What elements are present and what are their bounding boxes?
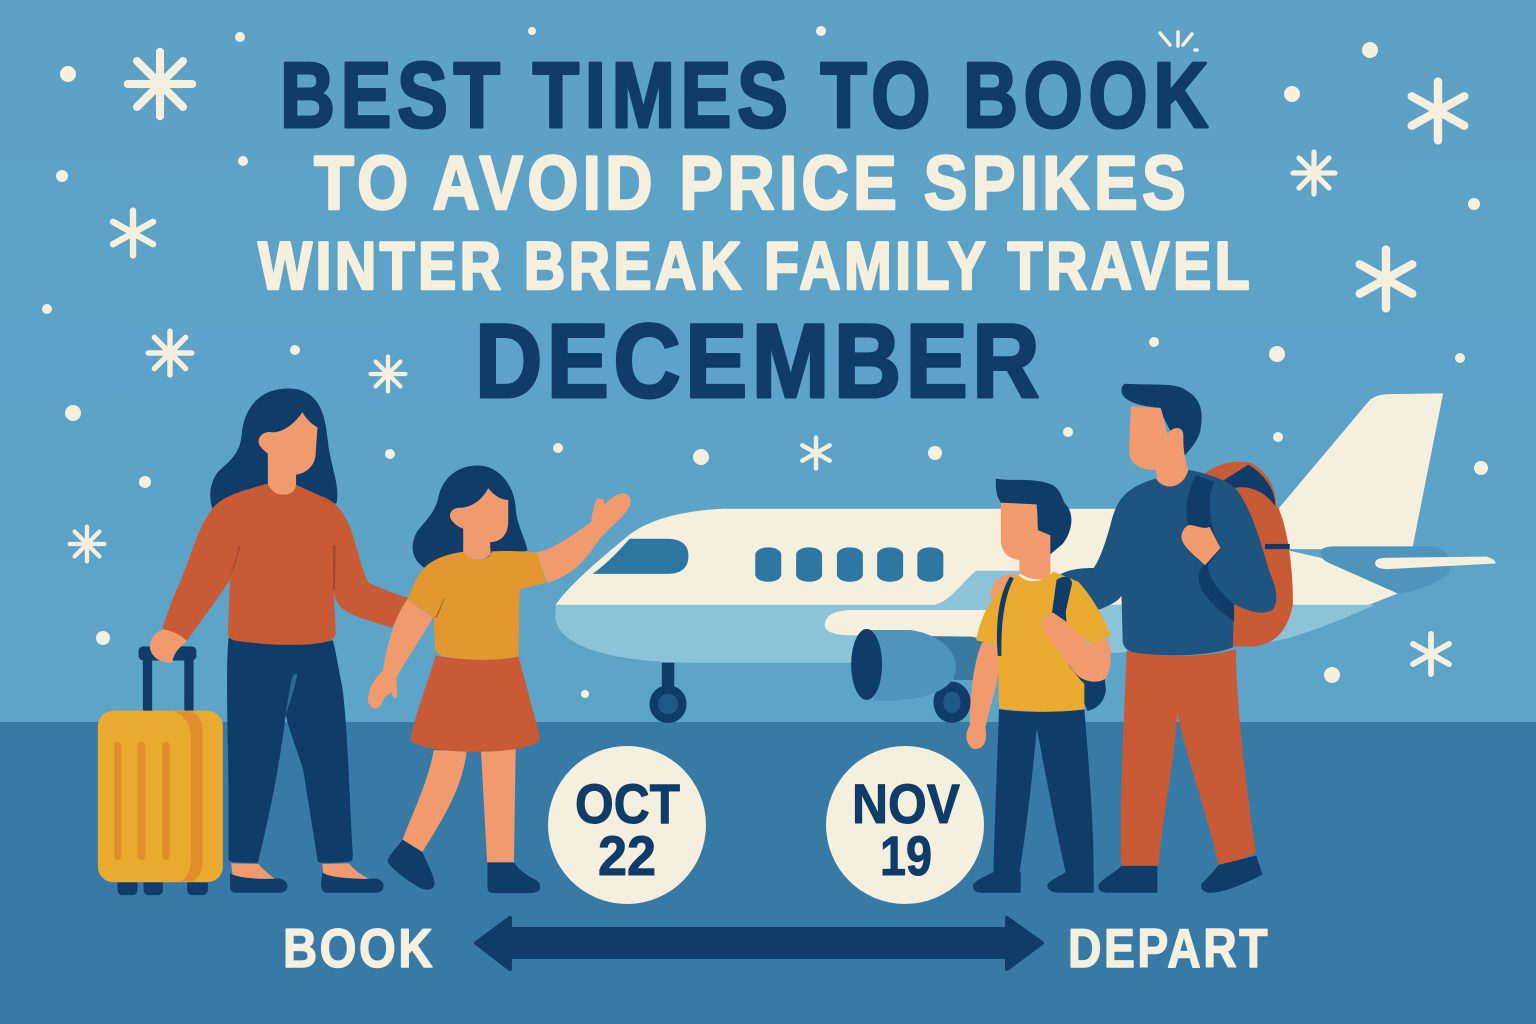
snowfall xyxy=(42,26,1488,698)
sky background xyxy=(0,0,1536,724)
date badge: oct 22: OCT xyxy=(575,772,680,835)
ground band xyxy=(0,722,1536,1024)
date badge: nov 19: NOV xyxy=(852,772,960,835)
boy with backpack xyxy=(966,478,1111,893)
sparkle above title xyxy=(1160,32,1197,50)
airplane xyxy=(555,393,1496,723)
heading: december: DECEMBER xyxy=(475,303,1044,420)
date badge: nov 19: 19 xyxy=(880,824,932,887)
subtitle: winter break family travel: WINTER BREAK FAMILY TRAVEL xyxy=(258,228,1253,304)
double-headed arrow xyxy=(476,918,1042,969)
father with backpack xyxy=(1053,384,1293,893)
date badge: oct 22 xyxy=(548,746,706,904)
title: best times to book: BEST TIMES TO BOOK xyxy=(280,43,1214,147)
mother with suitcase xyxy=(98,388,408,895)
date badge: nov 19 xyxy=(826,746,984,904)
subtitle: avoid price spikes: TO AVOID PRICE SPIKES xyxy=(314,141,1190,226)
label: book: BOOK xyxy=(283,917,435,979)
girl waving xyxy=(368,466,631,893)
label: depart: DEPART xyxy=(1068,917,1270,979)
date badge: oct 22: 22 xyxy=(598,824,656,887)
